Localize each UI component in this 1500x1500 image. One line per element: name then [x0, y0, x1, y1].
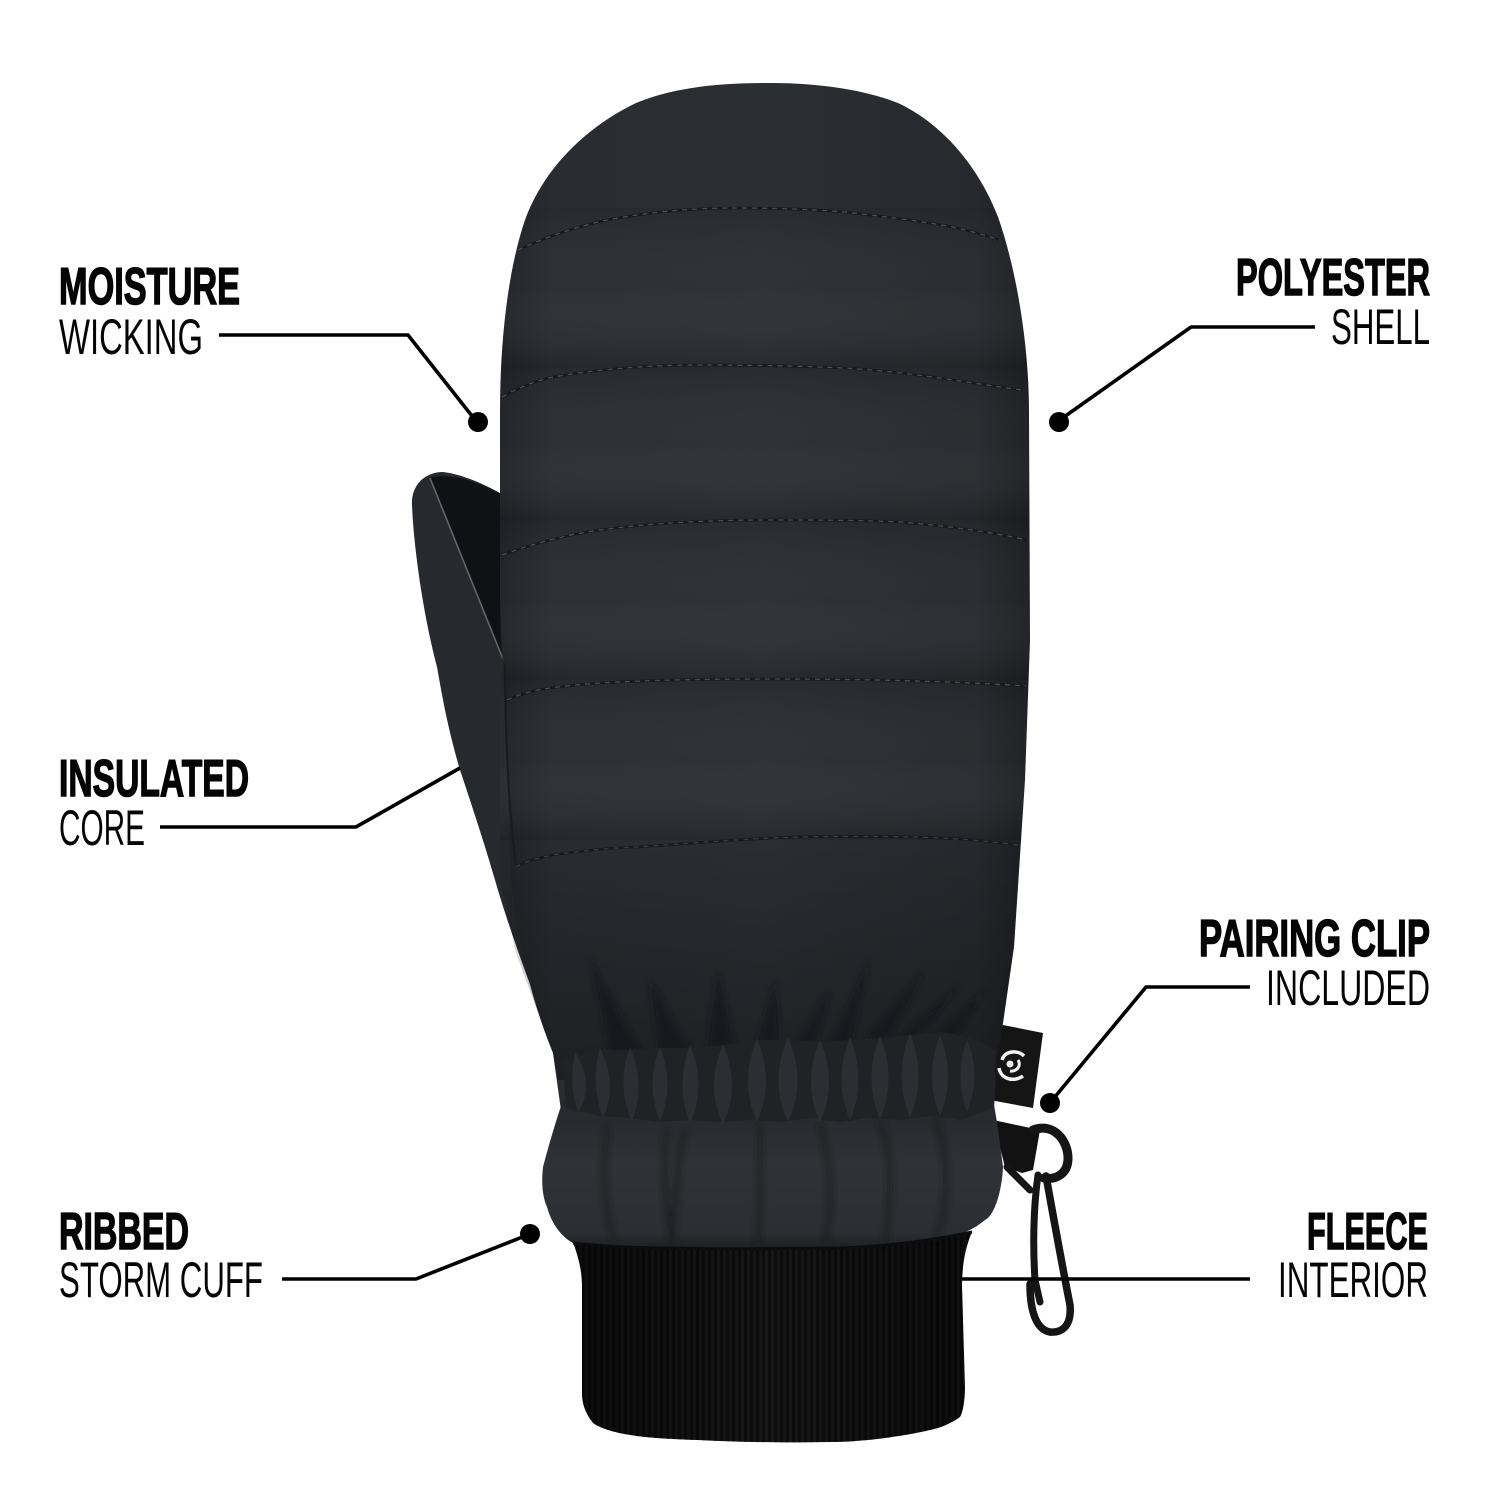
heading: INSULATED — [59, 750, 249, 808]
subheading: WICKING — [59, 309, 203, 365]
heading: RIBBED — [59, 1203, 189, 1261]
callout: polyester shell — [1049, 249, 1430, 432]
gathered elastic — [563, 1032, 996, 1124]
leader line — [962, 1277, 1250, 1281]
leader line — [1049, 327, 1315, 432]
thumb palm patch — [430, 476, 505, 664]
callout: insulated core — [59, 750, 460, 856]
hang tag with logo — [980, 1025, 1043, 1108]
leader line — [160, 768, 460, 827]
callout: pairing clip included — [1040, 910, 1430, 1113]
subheading: STORM CUFF — [59, 1252, 263, 1308]
leader line — [282, 1224, 540, 1279]
mitten main body — [490, 83, 1040, 1125]
callout: moisture wicking — [59, 258, 488, 432]
seams — [502, 208, 1027, 867]
callout: ribbed storm cuff — [59, 1203, 540, 1308]
mitten rib cuff — [572, 1232, 972, 1442]
leader line — [219, 335, 488, 432]
seam between thumb and body — [505, 664, 516, 867]
mitten lower puff — [542, 1080, 1003, 1250]
heading: MOISTURE — [59, 258, 240, 316]
callout: fleece interior — [962, 1203, 1428, 1308]
subheading: SHELL — [1331, 299, 1430, 355]
quilted panels — [500, 367, 1028, 1080]
folds above elastic — [595, 975, 968, 1050]
mitten thumb — [412, 472, 620, 1040]
subheading: CORE — [59, 800, 145, 856]
pairing clip — [993, 1120, 1070, 1332]
mitten illustration — [412, 83, 1070, 1442]
leader line — [1040, 987, 1250, 1113]
